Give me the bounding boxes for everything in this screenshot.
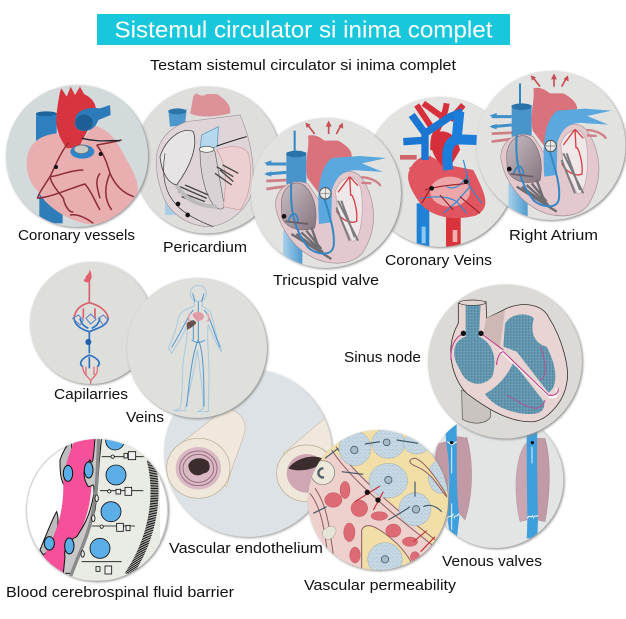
label: venous valves: Venous valves (442, 554, 542, 570)
label: veins: Veins (126, 410, 164, 426)
label: coronary veins: Coronary Veins (385, 253, 492, 269)
panel: vascular endothelium (164, 369, 337, 538)
panel: pericardium (134, 86, 282, 234)
panel: right atrium (476, 71, 626, 221)
label: vascular permeability: Vascular permeability (304, 578, 457, 594)
panel: sinus node (428, 284, 583, 440)
panel: venous valves (428, 412, 564, 549)
label: capillaries: Capilarries (54, 387, 128, 403)
label: tricuspid valve: Tricuspid valve (273, 273, 379, 289)
panel: tricuspid valve (251, 118, 402, 269)
panel: blood cerebrospinal fluid barrier (26, 431, 169, 582)
label: sinus node: Sinus node (344, 350, 421, 366)
panel: vascular permeability (307, 428, 452, 576)
label: coronary vessels: Coronary vessels (18, 228, 135, 244)
label: pericardium: Pericardium (163, 240, 247, 256)
label: vascular endothelium: Vascular endothelium (169, 541, 323, 557)
label: right atrium: Right Atrium (509, 228, 598, 244)
label: blood cerebrospinal fluid barrier: Blood cerebrospinal fluid barrier (6, 585, 234, 601)
title banner: Sistemul circulator si inima complet (114, 16, 493, 42)
panel: coronary vessels (6, 85, 149, 228)
panel: veins (127, 278, 268, 419)
panel: capillaries (30, 262, 153, 385)
panel: coronary veins (365, 97, 516, 248)
subtitle: Testam sistemul circulator si inima complet (150, 57, 457, 74)
